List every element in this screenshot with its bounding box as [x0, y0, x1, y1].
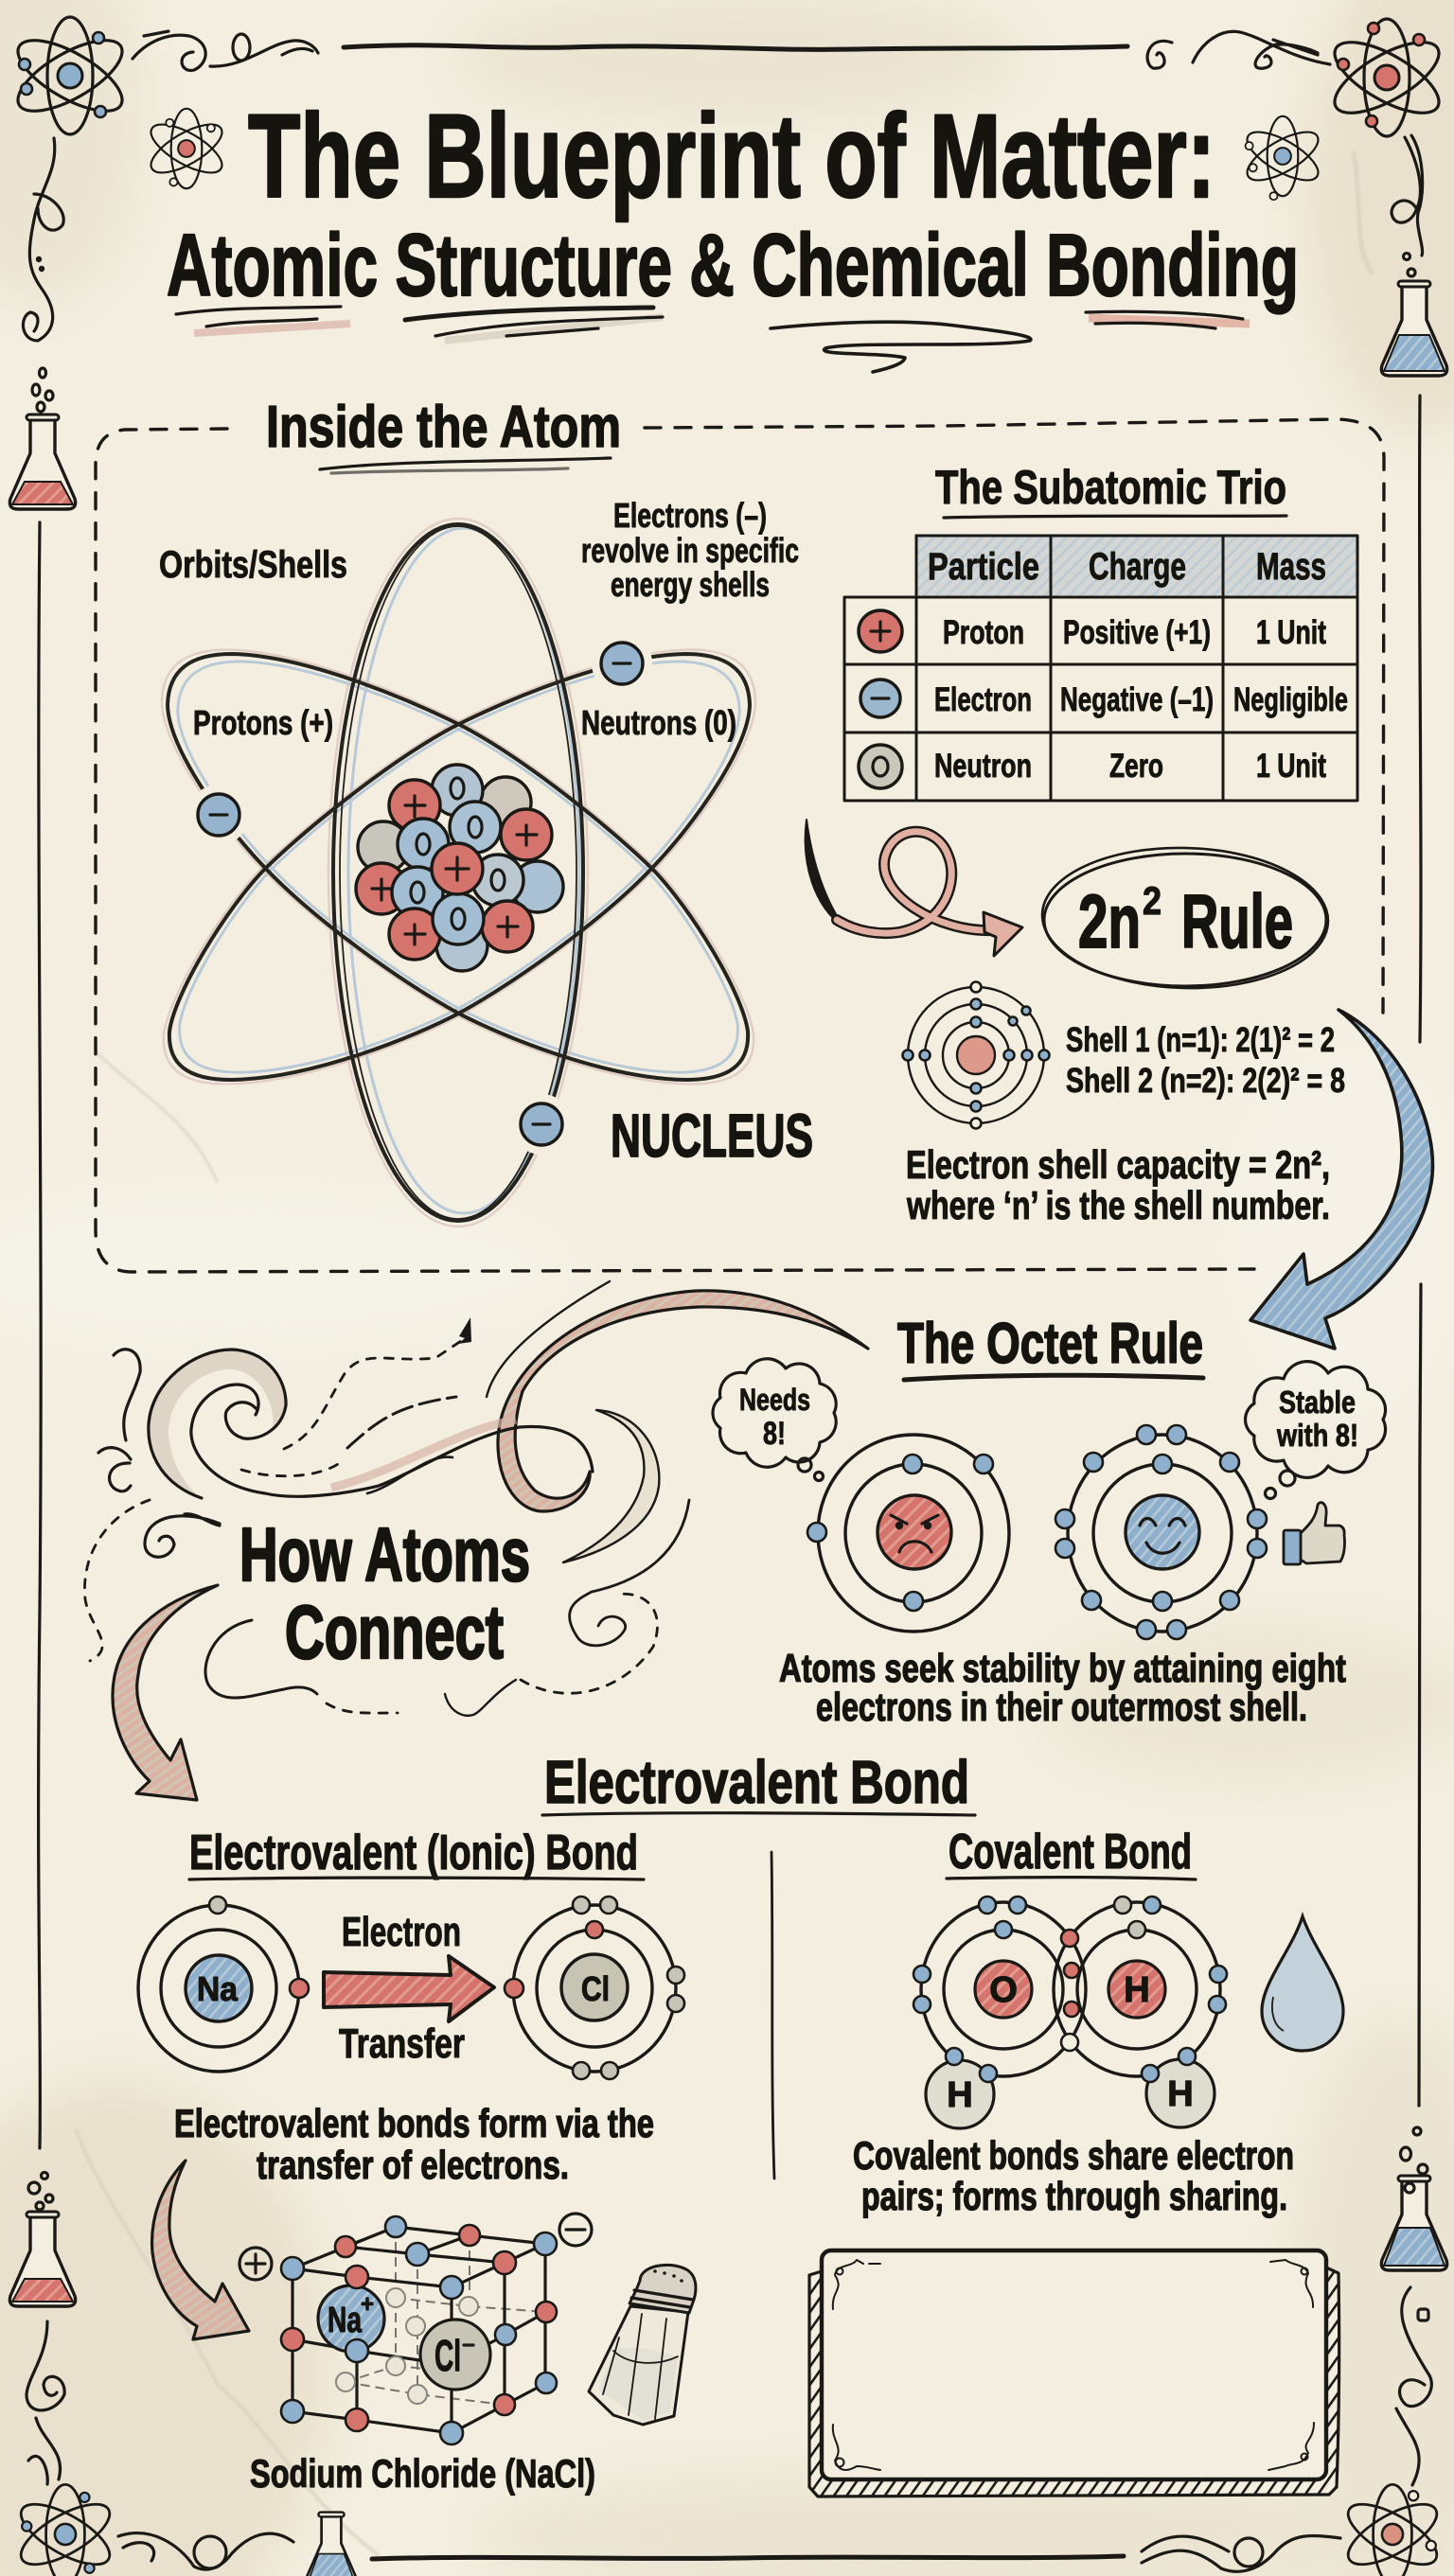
shell formulas: Shell 1 (n=1): 2(1)² = 2	[1066, 1020, 1335, 1059]
side rules	[39, 396, 1421, 2148]
row: Proton: Proton	[943, 614, 1024, 651]
row: Electron: Electron	[934, 681, 1032, 718]
thought bubble: Needs 8: Needs	[739, 1383, 810, 1417]
plus signs on protons	[372, 796, 537, 944]
flourish bottom-left	[118, 2533, 293, 2569]
panel: Electrovalent (Ionic) Bond	[138, 1826, 696, 2496]
icon: thumbs up	[1284, 1503, 1344, 1564]
label: Transfer: Transfer	[339, 2020, 465, 2067]
atom: Na: Na	[197, 1969, 239, 2008]
lattice bonds	[293, 2227, 546, 2433]
atom: Na	[138, 1897, 309, 2072]
panel: The Octet Rule	[713, 1312, 1386, 1729]
row: Neutron: 1 Unit	[1256, 748, 1326, 785]
hydrogen atoms: H	[1167, 2074, 1194, 2114]
column divider	[771, 1852, 774, 2179]
flourish bottom-right	[1142, 2535, 1340, 2571]
arrow: blue to octet rule	[1250, 1010, 1432, 1349]
bubbles right top	[1403, 254, 1415, 276]
table: subatomic particles	[844, 536, 1357, 801]
bubbles left bottom	[28, 2173, 53, 2210]
label: Electron: Electron	[342, 1909, 461, 1955]
icon: small atom right of title	[1240, 116, 1325, 200]
row: Neutron	[859, 745, 1326, 788]
callout: 2n2 Rule: 2n	[1078, 879, 1141, 963]
subheading underline	[947, 1878, 1196, 1879]
thought bubble: Stable with 8	[1246, 1362, 1386, 1499]
arrow: pink down	[113, 1585, 218, 1800]
text: shell capacity	[906, 1142, 1330, 1227]
lattice nodes	[281, 2216, 557, 2444]
atom diagram	[162, 519, 755, 1226]
thought bubble: Stable with 8: with 8!	[1276, 1418, 1358, 1453]
Na+ ion: Na	[328, 2301, 363, 2340]
label: Electrons: Electrons (–)	[613, 496, 767, 535]
row: Electron	[860, 679, 1348, 718]
heading: Inside the Atom: Inside the Atom	[266, 395, 621, 460]
heading underline	[904, 1375, 1203, 1380]
icon: flask bottom centre	[305, 2513, 358, 2576]
thought bubble: Needs 8	[713, 1359, 836, 1480]
bubbles right bottom	[1401, 2127, 1427, 2193]
shell formulas	[1066, 1020, 1345, 1100]
dashed arrow head	[458, 1317, 471, 1344]
flourish left upper	[23, 138, 63, 341]
callout: 2n2 Rule	[1040, 844, 1330, 992]
Cl- ion	[420, 2320, 490, 2390]
icon: flask right bottom	[1381, 2176, 1447, 2270]
zeros on neutrons	[411, 778, 505, 929]
label: Protons: Protons (+)	[193, 703, 333, 742]
callout: 2n2 Rule: Rule	[1181, 879, 1293, 963]
row: Neutron: Zero	[1109, 748, 1163, 785]
thought bubble: Stable with 8: Stable	[1279, 1385, 1356, 1420]
text: covalent description: pairs; forms through sharing.	[861, 2174, 1287, 2218]
icon: atom bottom-left	[12, 2484, 118, 2576]
thought bubble: Needs 8: 8!	[763, 1416, 786, 1452]
bubbles left top	[32, 368, 53, 412]
icon: small atom left of title	[144, 109, 229, 188]
nuclei O and H	[975, 1961, 1165, 2018]
heading underline	[320, 458, 611, 473]
orbit shading	[178, 528, 739, 1213]
arrow: pink to lattice	[152, 2161, 249, 2339]
text: octet description: electrons in their outermost shell.	[816, 1685, 1307, 1729]
electron: bottom	[511, 1094, 572, 1155]
heading: Electrovalent Bond: Electrovalent Bond	[544, 1748, 969, 1816]
angry face	[891, 1515, 938, 1552]
electron: top right	[592, 633, 652, 694]
nuclei O and H: O	[989, 1970, 1018, 2010]
heading: The Subatomic Trio: The Subatomic Trio	[935, 461, 1286, 514]
icon: flask left top	[9, 415, 76, 509]
empty note frame	[809, 2250, 1339, 2497]
Na+ ion	[318, 2285, 384, 2352]
row: Proton	[859, 610, 1326, 652]
row: Electron: Negative (–1)	[1060, 681, 1214, 718]
table header text: Particle	[928, 546, 1039, 588]
top rule line	[344, 45, 1127, 49]
dashed flourishes	[84, 1339, 657, 1713]
label: Orbits/Shells: Orbits/Shells	[159, 544, 347, 586]
dashed panel border	[96, 419, 1384, 1272]
shell formulas: Shell 2 (n=2): 2(2)² = 8	[1066, 1061, 1345, 1100]
minus sign	[559, 2214, 592, 2246]
frame front	[822, 2250, 1326, 2479]
flourish top-right	[1147, 31, 1330, 68]
arrow: loop to 2n2 rule	[806, 820, 1022, 956]
table header fills	[916, 536, 1357, 597]
row: Electron: Negligible	[1233, 681, 1348, 718]
flourish right lower	[1396, 2287, 1431, 2485]
atom: Cl	[505, 1897, 684, 2079]
text: shell capacity: where ‘n’ is the shell number.	[906, 1183, 1330, 1227]
small flourishes	[98, 1281, 689, 1716]
atom: Cl: Cl	[581, 1969, 610, 2008]
water molecule	[913, 1897, 1227, 2128]
label: Neutrons: Neutrons (0)	[581, 703, 736, 742]
faint back bonds	[346, 2227, 546, 2405]
row: Neutron: Neutron	[934, 748, 1032, 785]
heading: How Atoms: How Atoms	[239, 1512, 530, 1597]
text: electrovalent description: transfer of electrons.	[257, 2143, 569, 2187]
label: Electrons: revolve in specific	[581, 531, 799, 570]
shell diagram	[903, 982, 1049, 1128]
callout: 2n2 Rule: 2	[1143, 878, 1161, 923]
icon: atom top-left	[8, 17, 133, 134]
atom: stable	[1055, 1425, 1267, 1639]
subheading underline	[189, 1878, 644, 1879]
title	[167, 91, 1299, 314]
heading: Connect: Connect	[285, 1590, 504, 1674]
label: Sodium Chloride: Sodium Chloride (NaCl)	[250, 2451, 595, 2496]
table header text: Mass	[1256, 546, 1326, 588]
nucleus	[356, 765, 563, 971]
bottom rule line	[372, 2556, 1124, 2559]
frame hatched back	[809, 2267, 1339, 2497]
frame corner ornaments	[833, 2260, 1314, 2470]
panel: Inside the Atom	[96, 395, 1384, 1272]
smiley face	[1140, 1518, 1185, 1553]
label: NUCLEUS: NUCLEUS	[611, 1102, 813, 1170]
lattice: sodium chloride	[239, 2214, 592, 2444]
electrons	[913, 1897, 1227, 2082]
hydrogen atoms: H	[947, 2075, 973, 2115]
flourish top-left	[133, 31, 318, 70]
flourish left lower	[27, 2321, 64, 2484]
subheading: Covalent Bond	[949, 1825, 1192, 1879]
text: octet description	[779, 1646, 1346, 1729]
icon: flask right top	[1381, 281, 1447, 376]
atom: unstable	[807, 1435, 1009, 1632]
text: covalent description: Covalent bonds share electron	[853, 2133, 1294, 2178]
label: Electrons: energy shells	[611, 565, 770, 604]
icon: atom bottom-right	[1339, 2484, 1445, 2576]
icon: water drop	[1262, 1916, 1343, 2051]
swirl ribbons	[149, 1291, 868, 1562]
orbits	[168, 524, 750, 1221]
title underline strokes	[176, 307, 1250, 372]
subheading: Electrovalent (Ionic) Bond	[189, 1826, 638, 1880]
table grid	[844, 536, 1357, 801]
hydrogen atoms	[926, 2059, 1215, 2128]
text: electrovalent description	[174, 2101, 654, 2187]
label: Electrons	[581, 496, 799, 604]
table header text: Charge	[1089, 546, 1186, 588]
icon: atom top-right	[1324, 19, 1449, 136]
text: covalent description	[853, 2133, 1294, 2218]
Na+ ion: +	[361, 2289, 374, 2318]
nuclei O and H: H	[1124, 1970, 1150, 2010]
electron: left	[188, 785, 249, 845]
table header text	[928, 546, 1326, 588]
text: shell capacity: Electron shell capacity = 2n²,	[906, 1142, 1330, 1187]
arrow: electron transfer	[324, 1956, 494, 2021]
row: Proton: Positive (+1)	[1063, 614, 1211, 651]
heading: The Octet Rule: The Octet Rule	[897, 1312, 1203, 1375]
Cl- ion: Cl	[434, 2331, 461, 2380]
icon: salt shaker	[589, 2265, 696, 2425]
plus sign	[239, 2248, 272, 2280]
flourish right upper	[1392, 135, 1423, 256]
icon: flask left bottom	[9, 2212, 76, 2306]
text: electrovalent description: Electrovalent bonds form via the	[174, 2101, 654, 2145]
row: Proton: 1 Unit	[1256, 614, 1326, 651]
panel: Covalent Bond	[853, 1825, 1343, 2218]
section: How Atoms Connect	[84, 1281, 868, 1800]
faint nodes	[336, 2288, 478, 2404]
